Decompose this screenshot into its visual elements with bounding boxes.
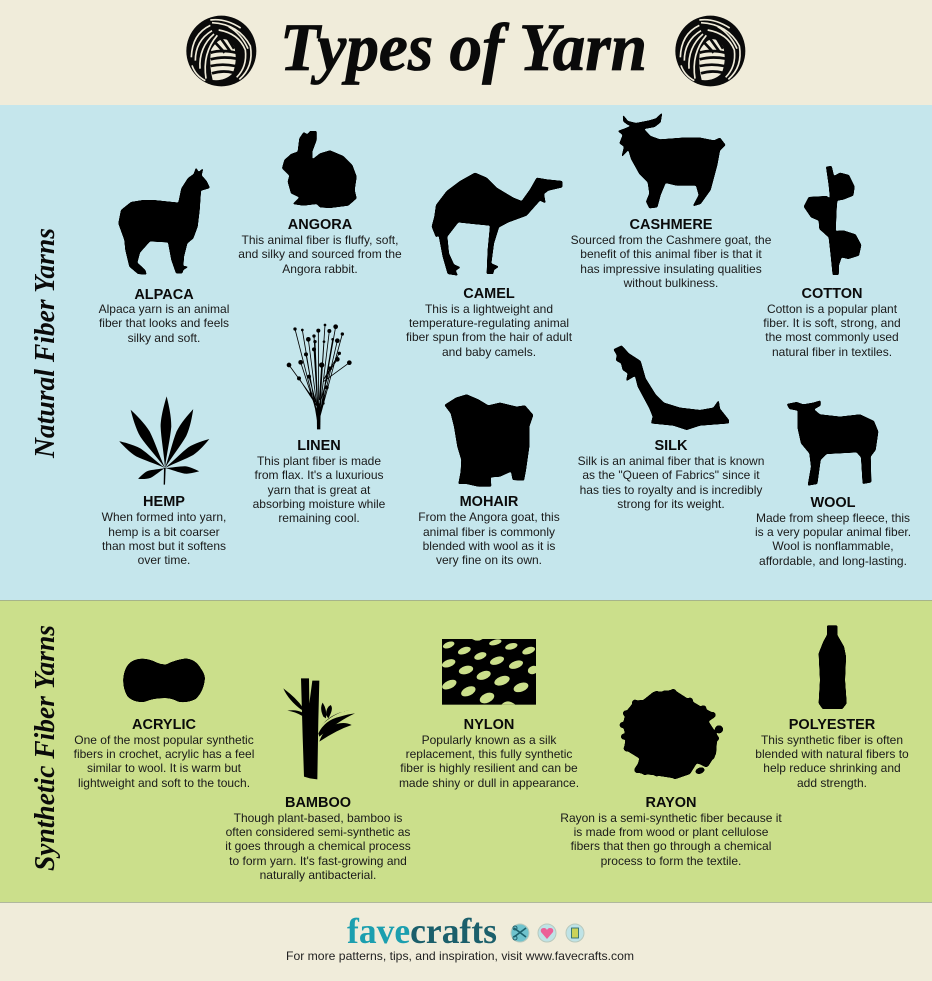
text: camel: and baby camels. — [442, 345, 536, 359]
text: rayon: Rayon is a semi-synthetic fiber because it — [560, 811, 782, 825]
text: cashmere: benefit of this animal fiber is that it — [580, 247, 762, 261]
footer logo: favecrafts — [347, 911, 497, 951]
text: wool: WOOL — [810, 495, 856, 511]
text: angora: and silky and sourced from the — [238, 247, 402, 261]
text: linen: LINEN — [297, 438, 341, 454]
text: mohair — [418, 494, 560, 567]
icon: goat — [618, 112, 726, 208]
text: mohair: very fine on its own. — [436, 553, 542, 567]
text: nylon: NYLON — [464, 717, 514, 733]
text: cashmere: CASHMERE — [630, 217, 713, 233]
text: acrylic: lightweight and soft to the touch. — [78, 776, 250, 790]
text: alpaca: silky and soft. — [128, 331, 200, 345]
text: linen: remaining cool. — [278, 511, 360, 525]
text: silk: as the "Queen of Fabrics" since it — [582, 468, 760, 482]
text: alpaca — [99, 287, 229, 345]
text: bamboo: to form yarn. It's fast-growing and — [229, 854, 407, 868]
icon: angora goat — [444, 394, 533, 487]
icon: heart badge — [538, 924, 556, 942]
text: wool: Made from sheep fleece, this — [756, 511, 910, 525]
text: hemp: hemp is a bit coarser — [108, 525, 220, 539]
icon: cotton — [804, 166, 861, 275]
text: acrylic: fibers in crochet, acrylic has a feel — [74, 747, 254, 761]
text: nylon: made shiny or dull in appearance. — [399, 776, 579, 790]
text: alpaca: Alpaca yarn is an animal — [99, 302, 229, 316]
text: polyester: add strength. — [797, 776, 867, 790]
text: linen: This plant fiber is made — [257, 454, 381, 468]
text: camel: temperature-regulating animal — [409, 316, 569, 330]
text: linen: yarn that is great at — [268, 483, 371, 497]
text: rayon: RAYON — [645, 795, 697, 811]
text: cashmere: without bulkiness. — [623, 276, 718, 290]
text: rayon — [560, 795, 782, 868]
text: wool: affordable, and long-lasting. — [759, 554, 907, 568]
text: bamboo: it goes through a chemical process — [225, 839, 411, 853]
text: mohair: blended with wool as it is — [423, 539, 555, 553]
text: acrylic — [74, 717, 254, 790]
text: rayon: is made from wood or plant cellulose — [574, 825, 769, 839]
panel: natural fiber background — [0, 105, 932, 600]
text: silk: strong for its weight. — [617, 497, 725, 511]
text: cotton — [763, 286, 901, 359]
text: silk: has ties to royalty and is incredibly — [580, 483, 762, 497]
icon: silkworm — [613, 345, 729, 430]
text: wool: Wool is nonflammable, — [772, 539, 894, 553]
heading: synthetic fiber yarns: Synthetic Fiber Yarns — [30, 625, 61, 871]
icon: acrylic skein — [123, 659, 205, 702]
text: hemp: HEMP — [143, 494, 185, 510]
text: hemp: When formed into yarn, — [102, 510, 226, 524]
icon: bamboo — [283, 678, 355, 779]
text: polyester: POLYESTER — [789, 717, 876, 733]
icon: alpaca — [118, 167, 210, 275]
footer tagline: For more patterns, tips, and inspiration, visit www.favecrafts.com — [286, 949, 634, 963]
text: bamboo: BAMBOO — [285, 795, 351, 811]
text: alpaca: fiber that looks and feels — [99, 316, 229, 330]
text: nylon: Popularly known as a silk — [422, 733, 557, 747]
text: polyester — [755, 717, 909, 790]
text: cashmere: has impressive insulating qualities — [580, 262, 762, 276]
text: hemp: over time. — [138, 553, 190, 567]
text: alpaca: ALPACA — [134, 287, 194, 303]
icon: rayon fiber clump — [623, 689, 723, 779]
text: angora: ANGORA — [288, 217, 353, 233]
text: camel — [406, 286, 573, 359]
panel: synthetic fiber background — [0, 600, 932, 902]
text: linen: from flax. It's a luxurious — [254, 468, 384, 482]
text: nylon: replacement, this fully synthetic — [406, 747, 572, 761]
text: camel: CAMEL — [463, 286, 515, 302]
icon: thread badge — [566, 924, 584, 942]
icon: yarn ball left — [186, 16, 256, 86]
icon: camel — [432, 173, 562, 276]
text: wool: is a very popular animal fiber. — [755, 525, 911, 539]
text: acrylic: One of the most popular synthetic — [74, 733, 254, 747]
title: Types of Yarn — [280, 9, 647, 85]
text: cashmere: Sourced from the Cashmere goat, the — [571, 233, 772, 247]
text: cashmere — [571, 217, 772, 290]
text: cotton: COTTON — [802, 286, 862, 302]
text: hemp — [102, 494, 226, 567]
text: bamboo: often considered semi-synthetic as — [226, 825, 410, 839]
icon: scissors badge — [511, 924, 529, 942]
icon: yarn ball right — [675, 16, 745, 86]
text: cotton: Cotton is a popular plant — [767, 302, 898, 316]
icon: linen — [287, 324, 352, 429]
text: bamboo: naturally antibacterial. — [260, 868, 376, 882]
text: hemp: than most but it softens — [102, 539, 226, 553]
text: nylon — [399, 717, 579, 790]
text: mohair: From the Angora goat, this — [418, 510, 560, 524]
text: linen — [253, 438, 386, 525]
text: mohair: MOHAIR — [460, 494, 519, 510]
icon: nylon mesh — [441, 638, 539, 705]
text: polyester: blended with natural fibers to — [755, 747, 909, 761]
text: cotton: fiber. It is soft, strong, and — [763, 316, 901, 330]
text: angora — [238, 217, 402, 276]
text: rayon: process to form the textile. — [601, 854, 741, 868]
text: wool — [755, 495, 911, 568]
icon: polyester bottle — [819, 625, 847, 709]
text: bamboo — [225, 795, 411, 882]
text: polyester: help reduce shrinking and — [763, 761, 901, 775]
text: polyester: This synthetic fiber is often — [761, 733, 903, 747]
text: silk: Silk is an animal fiber that is known — [578, 454, 764, 468]
text: acrylic: ACRYLIC — [132, 717, 196, 733]
text: camel: This is a lightweight and — [425, 302, 553, 316]
icon: rabbit — [282, 131, 357, 208]
heading: natural fiber yarns: Natural Fiber Yarns — [30, 228, 61, 459]
text: angora: This animal fiber is fluffy, soft, — [242, 233, 398, 247]
text: cotton: the most commonly used — [765, 330, 899, 344]
text: linen: absorbing moisture while — [253, 497, 386, 511]
text: mohair: animal fiber is commonly — [423, 525, 555, 539]
text: acrylic: similar to wool. It is warm but — [87, 761, 242, 775]
text: bamboo: Though plant-based, bamboo is — [234, 811, 402, 825]
text: cotton: natural fiber in textiles. — [772, 345, 892, 359]
text: silk — [578, 438, 764, 511]
icon: hemp leaf — [117, 396, 212, 485]
text: nylon: fiber is highly resilient and can be — [400, 761, 578, 775]
text: angora: Angora rabbit. — [282, 262, 358, 276]
header — [186, 9, 745, 86]
text: rayon: fibers that then go through a chemical — [571, 839, 771, 853]
text: camel: fiber spun from the hair of adult — [406, 330, 573, 344]
text: silk: SILK — [654, 438, 688, 454]
icon: sheep — [787, 400, 878, 486]
